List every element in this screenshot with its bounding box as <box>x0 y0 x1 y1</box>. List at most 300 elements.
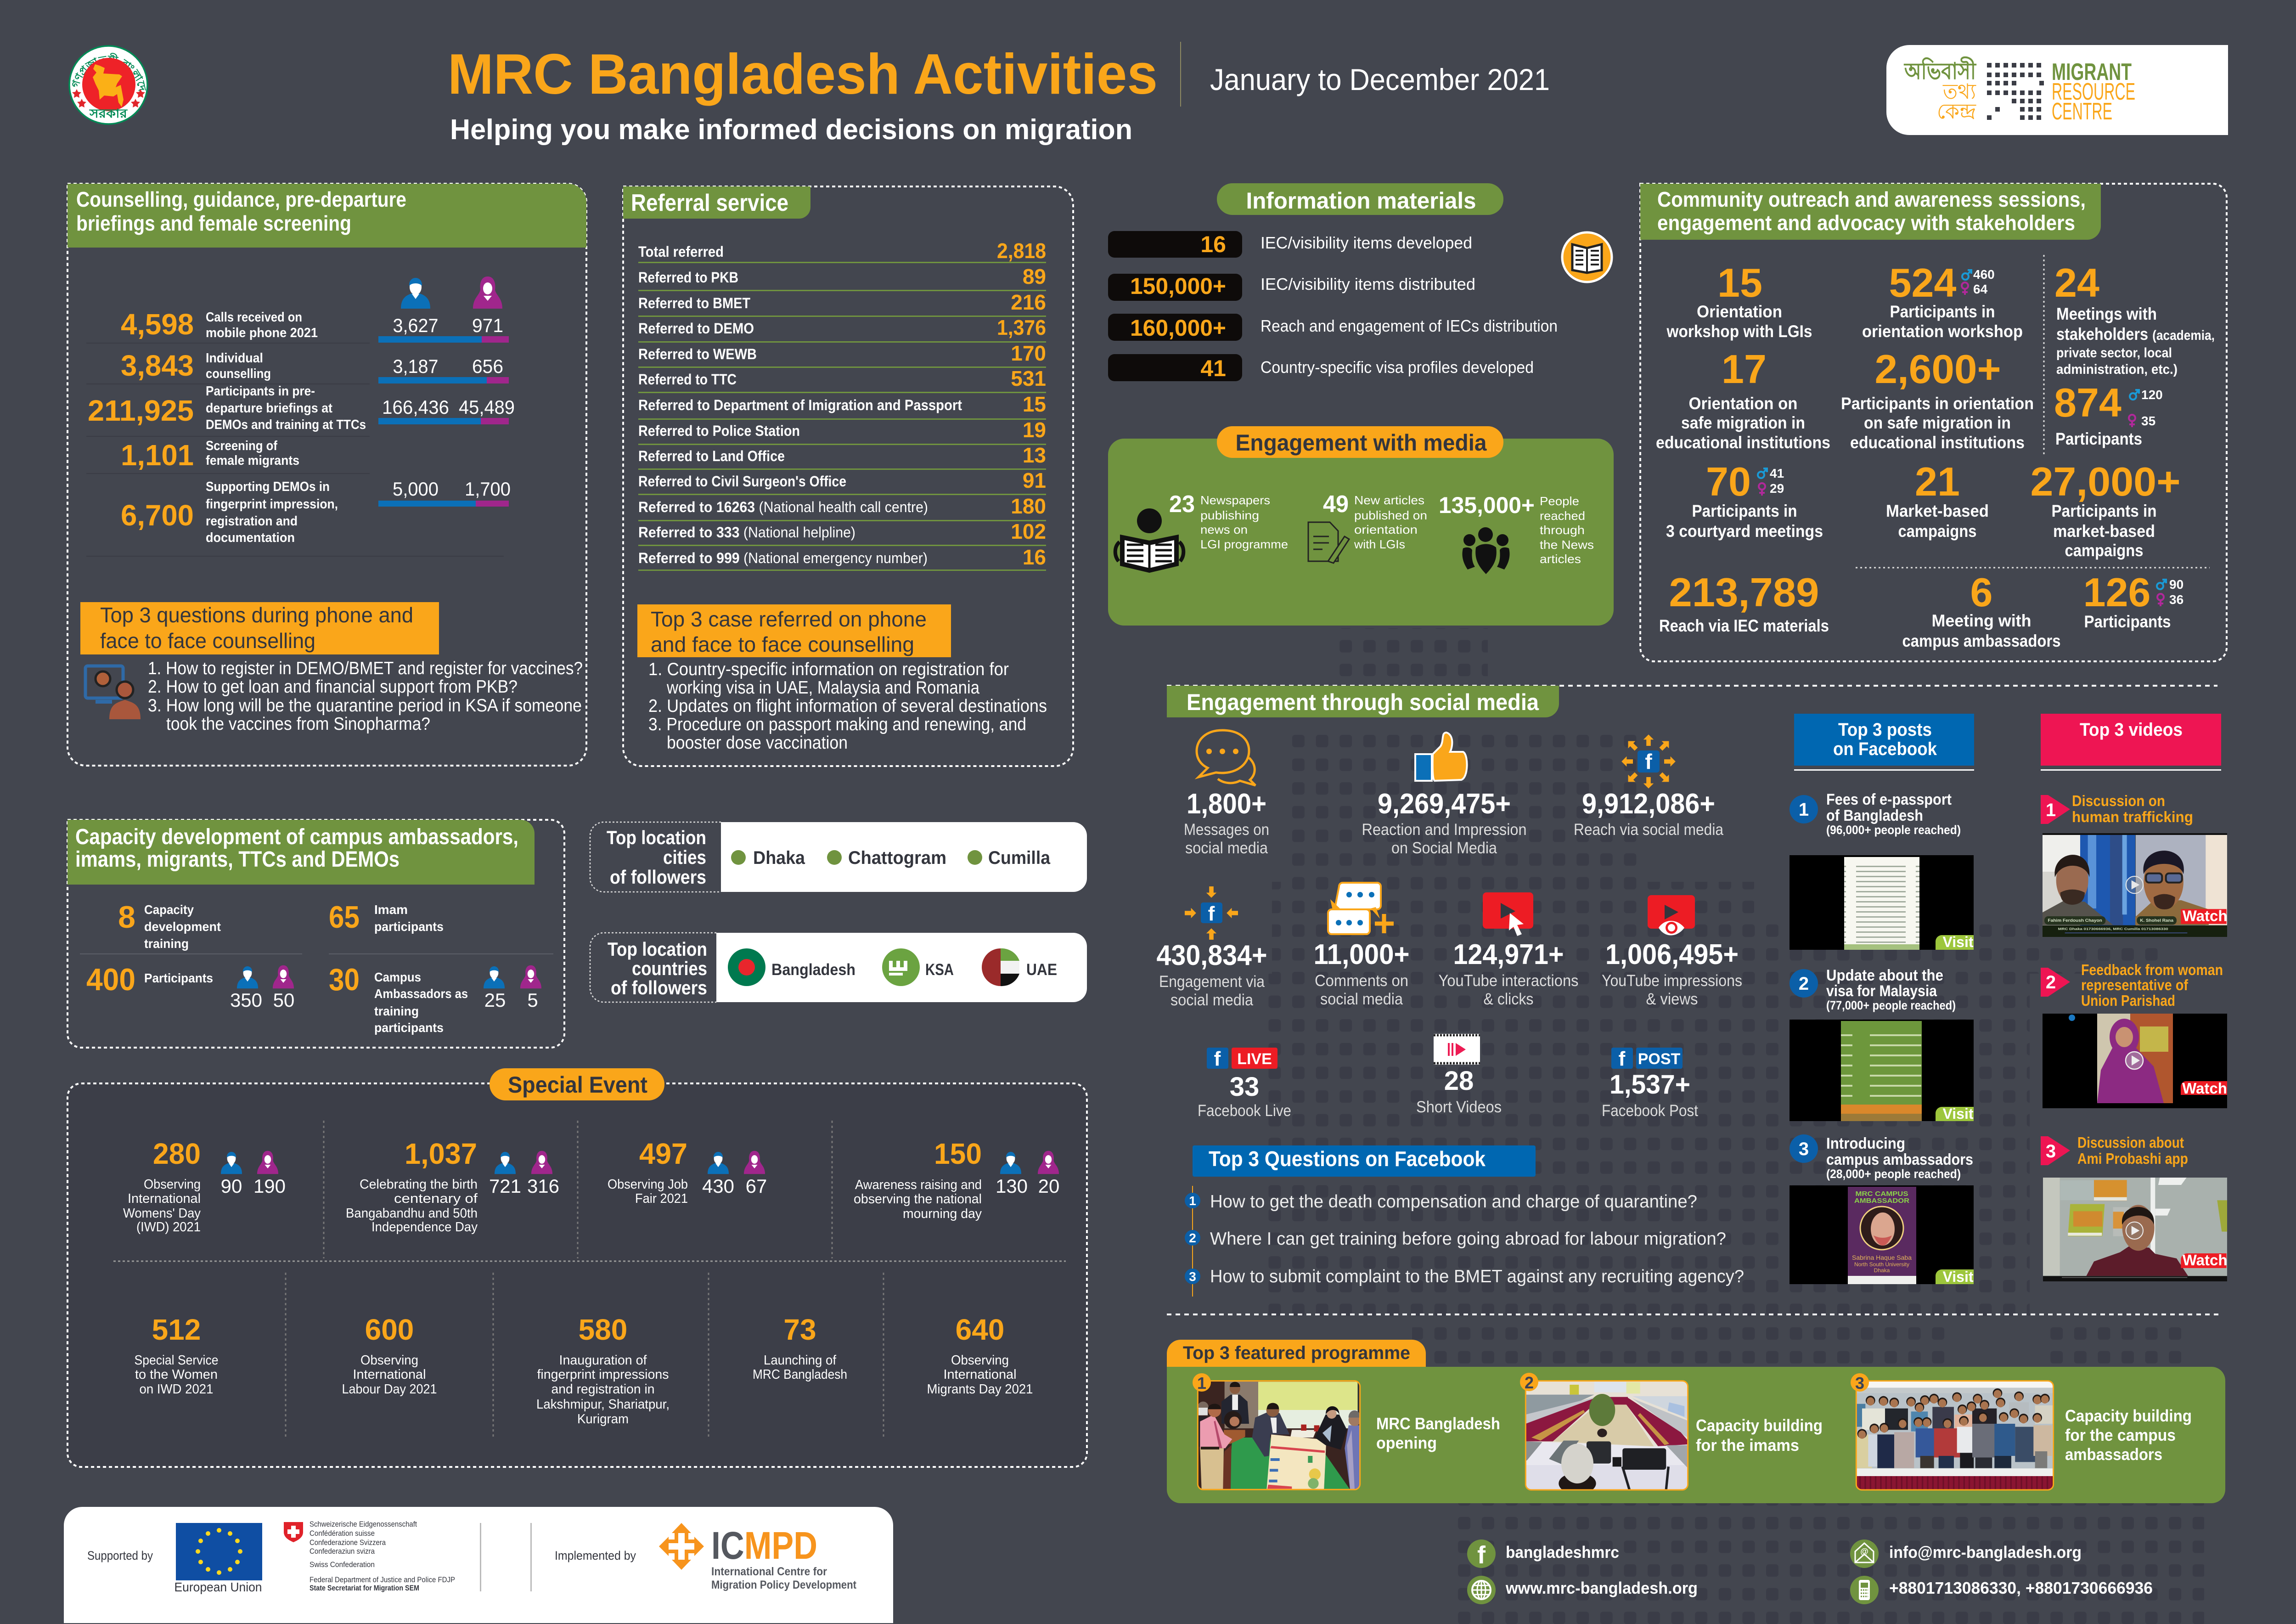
table: referrals: Referred to WEWB <box>638 346 757 362</box>
video 1: human trafficking <box>2072 808 2193 825</box>
row: female screening: Screening of <box>206 439 277 453</box>
photo 2 <box>1525 1381 1688 1494</box>
panel: top cities: Top location <box>607 827 706 848</box>
badge 3 <box>1851 1373 1869 1393</box>
stat: campus ambassadors training: Ambassadors as <box>374 987 468 1001</box>
stat: orientation workshop <box>1666 260 1812 341</box>
video 2: Feedback from woman <box>2081 961 2223 978</box>
video 3 <box>2041 1134 2227 1281</box>
stat: youtube interactions: & clicks <box>1483 990 1534 1008</box>
contact: phone <box>1850 1576 2153 1604</box>
panel: engagement with media <box>1108 426 1614 626</box>
stat: youtube interactions: 124,971+ <box>1453 939 1564 970</box>
stat: stakeholder participants: 874 <box>2054 380 2122 425</box>
logo: European Union <box>174 1523 262 1594</box>
event: fingerprint inauguration: Lakshmipur, Shariatpur, <box>536 1397 670 1412</box>
post 1: 1 <box>1799 800 1809 820</box>
post 2 <box>1790 967 1974 1122</box>
event: labour day <box>342 1313 437 1397</box>
stat: facebook post: POST <box>1638 1050 1681 1068</box>
stat: reactions: Reaction and Impression <box>1362 821 1526 839</box>
stat: reactions <box>1362 788 1526 857</box>
video 3 thumbnail <box>2043 1178 2227 1281</box>
stat: messages: social media <box>1185 839 1268 857</box>
event: migrants day <box>927 1313 1033 1397</box>
event: fingerprint inauguration <box>536 1313 670 1427</box>
heading: top 3 questions on facebook: Top 3 Questions on Facebook <box>1209 1147 1486 1171</box>
stat: training participants <box>86 962 294 1011</box>
logo: Swiss Confederation: Confederaziun svizra <box>310 1547 375 1556</box>
programme 2: Capacity building <box>1696 1416 1823 1435</box>
stat: short videos: 28 <box>1444 1066 1474 1096</box>
heading: featured programme <box>1167 1340 1426 1367</box>
logo: migrant resource centre: MIGRANT <box>2052 59 2132 85</box>
logo: European Union: European Union <box>174 1580 262 1594</box>
row: individual counselling: 3,187 <box>393 355 438 377</box>
row: individual counselling <box>86 349 509 384</box>
icon: document <box>1308 522 1349 563</box>
header divider <box>1180 42 1181 107</box>
panel: top cities: Chattogram <box>848 848 946 868</box>
table: referrals: Referred to Civil Surgeon's Office <box>638 473 846 490</box>
programme 1: MRC Bangladesh <box>1376 1414 1500 1433</box>
stat: market-based campaigns: 21 <box>1915 459 1960 504</box>
stat: reach: Reach via social media <box>1574 821 1723 839</box>
icon: facebook reach: f <box>1645 750 1652 773</box>
stat: stakeholder participants <box>2054 380 2163 448</box>
stat: people reached: People <box>1540 494 1579 508</box>
row: calls received: 971 <box>472 315 503 336</box>
icon: facebook engagement <box>1185 886 1238 940</box>
post 1: Fees of e-passport <box>1826 791 1952 808</box>
panel: top countries: of followers <box>611 977 707 998</box>
list: top cases: 1. Country-specific information on registration for <box>648 660 1009 679</box>
stat: facebook post: f <box>1619 1048 1626 1070</box>
stat: training participants: 350 <box>230 989 262 1011</box>
stat: campaign participants: Participants in <box>2052 502 2156 520</box>
row: supporting DEMOs: documentation <box>206 530 295 545</box>
stat: campus ambassadors meeting: Meeting with <box>1931 611 2032 630</box>
video 2 <box>2041 961 2227 1108</box>
stat: people reached: reached <box>1540 509 1585 523</box>
video 1: Discussion on <box>2072 792 2165 809</box>
stat: workshop participants: 64 <box>1973 282 1988 296</box>
stat: ambassador participants: 126 <box>2083 570 2150 615</box>
list: facebook questions: How to submit complaint to the BMET against any recruiting agency? <box>1210 1267 1744 1286</box>
list: top questions: 2. How to get loan and financial support from PKB? <box>148 677 518 697</box>
heading: top 3 videos <box>2041 714 2221 771</box>
stat rows: 160,000+ <box>1130 315 1226 341</box>
stat: messages: 1,800+ <box>1187 788 1266 820</box>
video 2: 2 <box>2046 972 2056 992</box>
stat: reactions: 9,269,475+ <box>1378 788 1511 820</box>
post 2: (77,000+ people reached) <box>1826 998 1956 1012</box>
row: supporting DEMOs: 1,700 <box>465 478 511 500</box>
table: referrals <box>638 239 1046 571</box>
stat: facebook live <box>1198 1048 1291 1120</box>
event: birth centenary: Independence Day <box>371 1220 478 1235</box>
stat rows: Reach and engagement of IECs distribution <box>1261 316 1558 335</box>
stat: imam participants: participants <box>374 919 444 934</box>
panel: top cities: of followers <box>610 866 706 888</box>
heading: counselling: briefings and female screening <box>76 211 351 235</box>
row: pre-departure briefings: DEMOs and training at TTCs <box>206 417 366 432</box>
stat: capacity development training: Capacity <box>144 902 194 917</box>
stat: campus ambassadors training: 25 <box>484 989 506 1011</box>
stat: safe migration orientation: Orientation on <box>1689 394 1797 413</box>
event: migrants day: Migrants Day 2021 <box>927 1382 1033 1397</box>
list: top questions: 3. How long will be the quarantine period in KSA if someone <box>148 696 582 716</box>
stat: youtube impressions: 1,006,495+ <box>1605 939 1739 970</box>
callout: top 3 cases: Top 3 case referred on phone <box>651 607 927 631</box>
badge 1 <box>1193 1373 1211 1393</box>
stat: newspapers: publishing <box>1200 508 1259 522</box>
event: special service: on IWD 2021 <box>140 1382 213 1397</box>
stat: reach <box>1574 788 1723 839</box>
stat: messages: Messages on <box>1184 821 1269 839</box>
video 1 thumbnail: Fahim Ferdoush Chayon <box>2048 918 2102 923</box>
post 2: 2 <box>1799 974 1809 994</box>
list: top cases: booster dose vaccination <box>667 733 848 753</box>
post 1: (96,000+ people reached) <box>1826 823 1961 837</box>
panel: top countries: KSA <box>925 961 954 979</box>
stat: facebook live: 33 <box>1230 1072 1259 1102</box>
stat: comments: 11,000+ <box>1313 939 1410 970</box>
heading: referral: Referral service <box>631 190 788 216</box>
stat: youtube impressions <box>1602 939 1742 1008</box>
event: migrants day: International <box>943 1367 1017 1382</box>
logo: Swiss Confederation: Confédération suisse <box>310 1529 375 1538</box>
stat: imam participants <box>329 900 444 935</box>
stat: training participants: 400 <box>86 962 135 997</box>
stat: orientation workshop: Orientation <box>1697 302 1782 321</box>
footer: supporters: Supported by <box>87 1549 153 1562</box>
heading: special event: Special Event <box>508 1072 647 1098</box>
logo: migrant resource centre: RESOURCE <box>2052 79 2135 105</box>
stat: safe migration participants: 2,600+ <box>1874 346 2001 392</box>
event: IWD: (IWD) 2021 <box>136 1220 201 1235</box>
icon: youtube click <box>1483 892 1533 936</box>
stat: stakeholder meetings <box>2054 260 2215 377</box>
stat rows: 41 <box>1200 355 1226 381</box>
stat: comments: social media <box>1320 990 1403 1008</box>
post 3: (28,000+ people reached) <box>1826 1167 1961 1181</box>
programme 1: opening <box>1376 1433 1437 1452</box>
event: IWD: 90 <box>221 1175 242 1197</box>
heading: special event <box>490 1068 664 1100</box>
stat: stakeholder meetings: Meetings with <box>2056 304 2157 323</box>
programme 3: Capacity building <box>2065 1406 2192 1425</box>
footer: supporters: Implemented by <box>555 1549 636 1562</box>
stat: safe migration participants: on safe migration in <box>1864 413 2011 432</box>
stat: stakeholder participants: 120 <box>2141 388 2163 402</box>
logo: ICMPD: Migration Policy Development <box>711 1579 857 1591</box>
event: IWD <box>123 1137 286 1235</box>
table: referrals: 1,376 <box>997 316 1046 339</box>
list: facebook questions: How to get the death compensation and charge of quarantine? <box>1210 1192 1697 1212</box>
heading: top 3 posts <box>1794 714 1974 771</box>
list: top cases <box>648 660 1047 753</box>
stat: workshop participants: 460 <box>1973 267 1995 282</box>
table: referrals: 216 <box>1011 290 1046 314</box>
row: individual counselling: counselling <box>206 367 271 381</box>
event: fingerprint inauguration: fingerprint impressions <box>537 1367 669 1382</box>
list: facebook questions <box>1185 1186 1744 1297</box>
icon: thumbs up <box>1415 733 1467 781</box>
event: birth centenary: 1,037 <box>405 1137 477 1170</box>
stat: courtyard meetings: 3 courtyard meetings <box>1666 522 1823 541</box>
table: referrals: 89 <box>1023 265 1046 288</box>
row: calls received: Calls received on <box>206 310 302 325</box>
panel: top countries: Top location <box>608 938 707 960</box>
video 2 thumbnail <box>2043 1014 2227 1108</box>
icon: counsellors <box>85 666 141 719</box>
heading: counselling <box>68 184 586 248</box>
video 1: 1 <box>2046 800 2056 820</box>
logo: Swiss Confederation: Confederazione Svizzera <box>310 1538 386 1547</box>
stat: articles: orientation <box>1354 523 1418 536</box>
stat: campaign participants: 27,000+ <box>2031 459 2180 504</box>
icon: Bangladesh flag <box>728 948 765 986</box>
icons: male and female <box>401 276 502 309</box>
heading: community outreach: engagement and advocacy with stakeholders <box>1657 211 2075 235</box>
stat: campaign participants: campaigns <box>2065 541 2144 560</box>
video 1 <box>2041 792 2227 937</box>
stat: newspapers: 23 <box>1169 491 1195 518</box>
stat: newspapers: LGI programme <box>1200 537 1288 551</box>
stat: stakeholder participants: 35 <box>2141 414 2155 428</box>
video 2: representative of <box>2081 976 2189 993</box>
post 3: 3 <box>1799 1139 1809 1159</box>
video 3: 3 <box>2046 1141 2056 1162</box>
logo: ICMPD <box>659 1523 857 1591</box>
section: engagement through social media <box>1156 686 2227 1297</box>
row: supporting DEMOs: fingerprint impression, <box>206 497 338 512</box>
video 3: Discussion about <box>2077 1134 2184 1151</box>
heading: top 3 posts: Top 3 posts <box>1838 720 1932 740</box>
video 3: Ami Probashi app <box>2077 1150 2188 1167</box>
stat: engagement <box>1156 940 1267 1009</box>
photo 3 <box>1856 1381 2054 1490</box>
stat: campus ambassadors training: training <box>374 1004 419 1018</box>
logo: migrant resource centre: কেন্দ্র <box>1937 99 1976 123</box>
heading: information materials: Information materials <box>1246 188 1476 214</box>
stat: articles: 49 <box>1323 491 1349 518</box>
photo 1 <box>1198 1381 1361 1489</box>
event: IWD: Womens' Day <box>123 1206 201 1221</box>
row: individual counselling: 656 <box>472 355 503 377</box>
table: referrals: 15 <box>1023 392 1046 416</box>
row: supporting DEMOs <box>86 478 511 557</box>
logo: Swiss Confederation <box>284 1520 455 1592</box>
table: referrals: Referred to 333 (National helpline) <box>638 524 855 541</box>
post 3 <box>1790 1134 1974 1285</box>
contact: email: @ <box>1860 1547 1868 1556</box>
stat rows <box>1108 231 1558 381</box>
event: birth centenary <box>346 1137 559 1235</box>
contact: website: www.mrc-bangladesh.org <box>1505 1579 1698 1597</box>
stat: campaign participants <box>2031 459 2180 560</box>
stat: market-based campaigns: Market-based <box>1886 502 1989 520</box>
event: migrants day: Observing <box>951 1353 1009 1368</box>
programme 3: for the campus <box>2065 1426 2176 1444</box>
event: labour day: International <box>353 1367 426 1382</box>
event: special service: Special Service <box>134 1353 219 1368</box>
list: top cases: working visa in UAE, Malaysia and Romania <box>666 678 979 698</box>
stat: stakeholder participants: Participants <box>2055 429 2142 448</box>
event: job fair <box>608 1137 767 1206</box>
heading: top 3 questions on facebook <box>1193 1145 1536 1177</box>
stat: capacity development training: 8 <box>118 900 135 935</box>
icon: reader <box>1115 508 1183 570</box>
event: special service: 512 <box>152 1313 201 1346</box>
icon: comments <box>1328 883 1394 934</box>
callout: top 3 questions: face to face counselling <box>100 629 315 653</box>
heading: social media: Engagement through social media <box>1187 689 1539 715</box>
row: female screening <box>86 439 370 474</box>
programme 2: for the imams <box>1696 1436 1799 1455</box>
event: job fair: Fair 2021 <box>635 1191 688 1206</box>
logo: Swiss Confederation: Swiss Confederation <box>310 1560 375 1569</box>
heading: counselling: Counselling, guidance, pre-departure <box>76 187 406 211</box>
post 1: of Bangladesh <box>1826 807 1923 824</box>
stat: short videos <box>1416 1034 1502 1116</box>
stat: safe migration orientation: safe migration in <box>1681 413 1805 432</box>
event: launching MRC: MRC Bangladesh <box>753 1367 847 1382</box>
stat: articles: New articles <box>1354 493 1424 507</box>
stat rows: IEC/visibility items developed <box>1261 233 1472 252</box>
panel: top cities <box>590 822 1087 892</box>
stat: facebook live: f <box>1214 1048 1221 1070</box>
contact details <box>1467 1539 2153 1604</box>
row: calls received: 3,627 <box>393 315 438 336</box>
event: labour day: 600 <box>365 1313 414 1346</box>
row: female screening: female migrants <box>206 453 299 468</box>
heading: community outreach <box>1640 184 2101 240</box>
heading: community outreach: Community outreach and awareness sessions, <box>1657 187 2086 211</box>
post 1 <box>1790 791 1974 950</box>
video 1 thumbnail <box>2043 833 2227 937</box>
event: fingerprint inauguration: Kurigram <box>577 1412 629 1427</box>
stat: campus ambassadors meeting: campus ambassadors <box>1902 632 2061 650</box>
logo: Swiss Confederation: Federal Department of Justice and Police FDJP <box>310 1575 455 1584</box>
event: IWD: 190 <box>253 1175 286 1197</box>
stat: courtyard meetings <box>1666 459 1823 541</box>
stat: imam participants: Imam <box>374 902 408 917</box>
stat: newspapers: news on <box>1200 523 1248 536</box>
panel: capacity development <box>68 820 564 1048</box>
list: facebook questions: Where I can get training before going abroad for labour migration? <box>1210 1229 1726 1249</box>
stat: orientation workshop: 15 <box>1717 260 1762 305</box>
event: birth centenary: 721 <box>489 1175 521 1197</box>
event: special service <box>134 1313 219 1397</box>
stat: facebook post <box>1602 1048 1698 1120</box>
stat: training participants: 50 <box>273 989 294 1011</box>
table: referrals: 531 <box>1011 367 1046 390</box>
badge 3: 3 <box>1855 1374 1864 1393</box>
icon: facebook engagement: f <box>1208 902 1215 925</box>
table: referrals: Total referred <box>638 243 724 260</box>
stat: courtyard meetings: 41 <box>1770 466 1784 480</box>
event: mourning day <box>854 1137 1059 1221</box>
table: referrals: Referred to 16263 (National health call centre) <box>638 499 928 515</box>
panel: top cities: Cumilla <box>988 848 1051 868</box>
stat: short videos: Short Videos <box>1416 1098 1502 1116</box>
logo: migrant resource centre: অভিবাসী <box>1903 56 1976 84</box>
badge 2 <box>1520 1373 1538 1392</box>
row: pre-departure briefings <box>86 384 515 437</box>
stat: capacity development training: development <box>144 919 221 934</box>
stat: youtube impressions: & views <box>1646 990 1698 1008</box>
stat: courtyard meetings: 70 <box>1706 459 1751 504</box>
stat: stakeholder meetings: private sector, local <box>2056 345 2172 361</box>
stat: stakeholder meetings: administration, etc.) <box>2056 362 2178 377</box>
stat: safe migration participants: educational institutions <box>1850 433 2025 452</box>
heading: featured programme: Top 3 featured programme <box>1183 1343 1410 1363</box>
table: referrals: 91 <box>1023 468 1046 492</box>
callout: top 3 cases <box>637 604 951 657</box>
callout: top 3 questions: Top 3 questions during phone and <box>100 603 413 627</box>
post 3: MRC CAMPUS <box>1855 1190 1908 1198</box>
event: birth centenary: Bangabandhu and 50th <box>346 1206 478 1221</box>
table: referrals: Referred to DEMO <box>638 320 754 337</box>
panel: top countries: UAE <box>1026 961 1057 979</box>
stat: workshop participants: Participants in <box>1890 302 1995 321</box>
video 2: Union Parishad <box>2081 992 2175 1009</box>
heading: engagement with media: Engagement with media <box>1235 430 1487 456</box>
event: mourning day: 150 <box>934 1137 982 1170</box>
stat: workshop participants: 524 <box>1889 260 1956 305</box>
list: facebook questions: 1 <box>1189 1194 1196 1208</box>
stat: articles: with LGIs <box>1354 537 1405 551</box>
contact: email: info@mrc-bangladesh.org <box>1889 1543 2082 1562</box>
stat: market-based campaigns: campaigns <box>1898 522 1976 541</box>
stat: imam participants: 65 <box>329 900 360 935</box>
icon: newspaper <box>1562 232 1612 282</box>
post 3: Visit <box>1942 1269 1974 1285</box>
event: launching MRC: Launching of <box>764 1353 837 1368</box>
heading: information materials <box>1217 183 1503 215</box>
row: supporting DEMOs: Supporting DEMOs in <box>206 479 330 494</box>
icon: youtube views <box>1648 895 1695 935</box>
table: referrals: Referred to PKB <box>638 269 738 286</box>
list: facebook questions: 2 <box>1189 1231 1196 1245</box>
row: supporting DEMOs: 5,000 <box>393 478 439 500</box>
event: birth centenary: centenary of <box>394 1191 478 1206</box>
stat: IEC reach: Reach via IEC materials <box>1659 616 1829 635</box>
stat: messages <box>1184 788 1269 857</box>
event: mourning day: 20 <box>1038 1175 1059 1197</box>
event: migrants day: 640 <box>956 1313 1004 1346</box>
table: referrals: 180 <box>1011 494 1046 518</box>
contact: facebook: bangladeshmrc <box>1506 1543 1619 1562</box>
stat: safe migration participants: Participants in orientation <box>1841 394 2034 413</box>
stat: safe migration orientation: 17 <box>1722 346 1767 392</box>
post 3: North South University <box>1854 1261 1909 1268</box>
event: job fair: 430 <box>702 1175 734 1197</box>
stat: people reached: the News <box>1540 538 1594 552</box>
post 3: AMBASSADOR <box>1854 1197 1909 1205</box>
event: birth centenary: 316 <box>527 1175 559 1197</box>
event: mourning day: Awareness raising and <box>855 1178 982 1192</box>
post 3: campus ambassadors <box>1826 1151 1973 1168</box>
heading: top 3 videos: Top 3 videos <box>2080 720 2183 740</box>
heading: top 3 posts: on Facebook <box>1833 739 1937 759</box>
event: launching MRC <box>753 1313 847 1382</box>
event: job fair: 497 <box>639 1137 687 1170</box>
video 1 thumbnail: K. Shohel Rana <box>2140 918 2174 923</box>
table: referrals: Referred to BMET <box>638 295 750 311</box>
